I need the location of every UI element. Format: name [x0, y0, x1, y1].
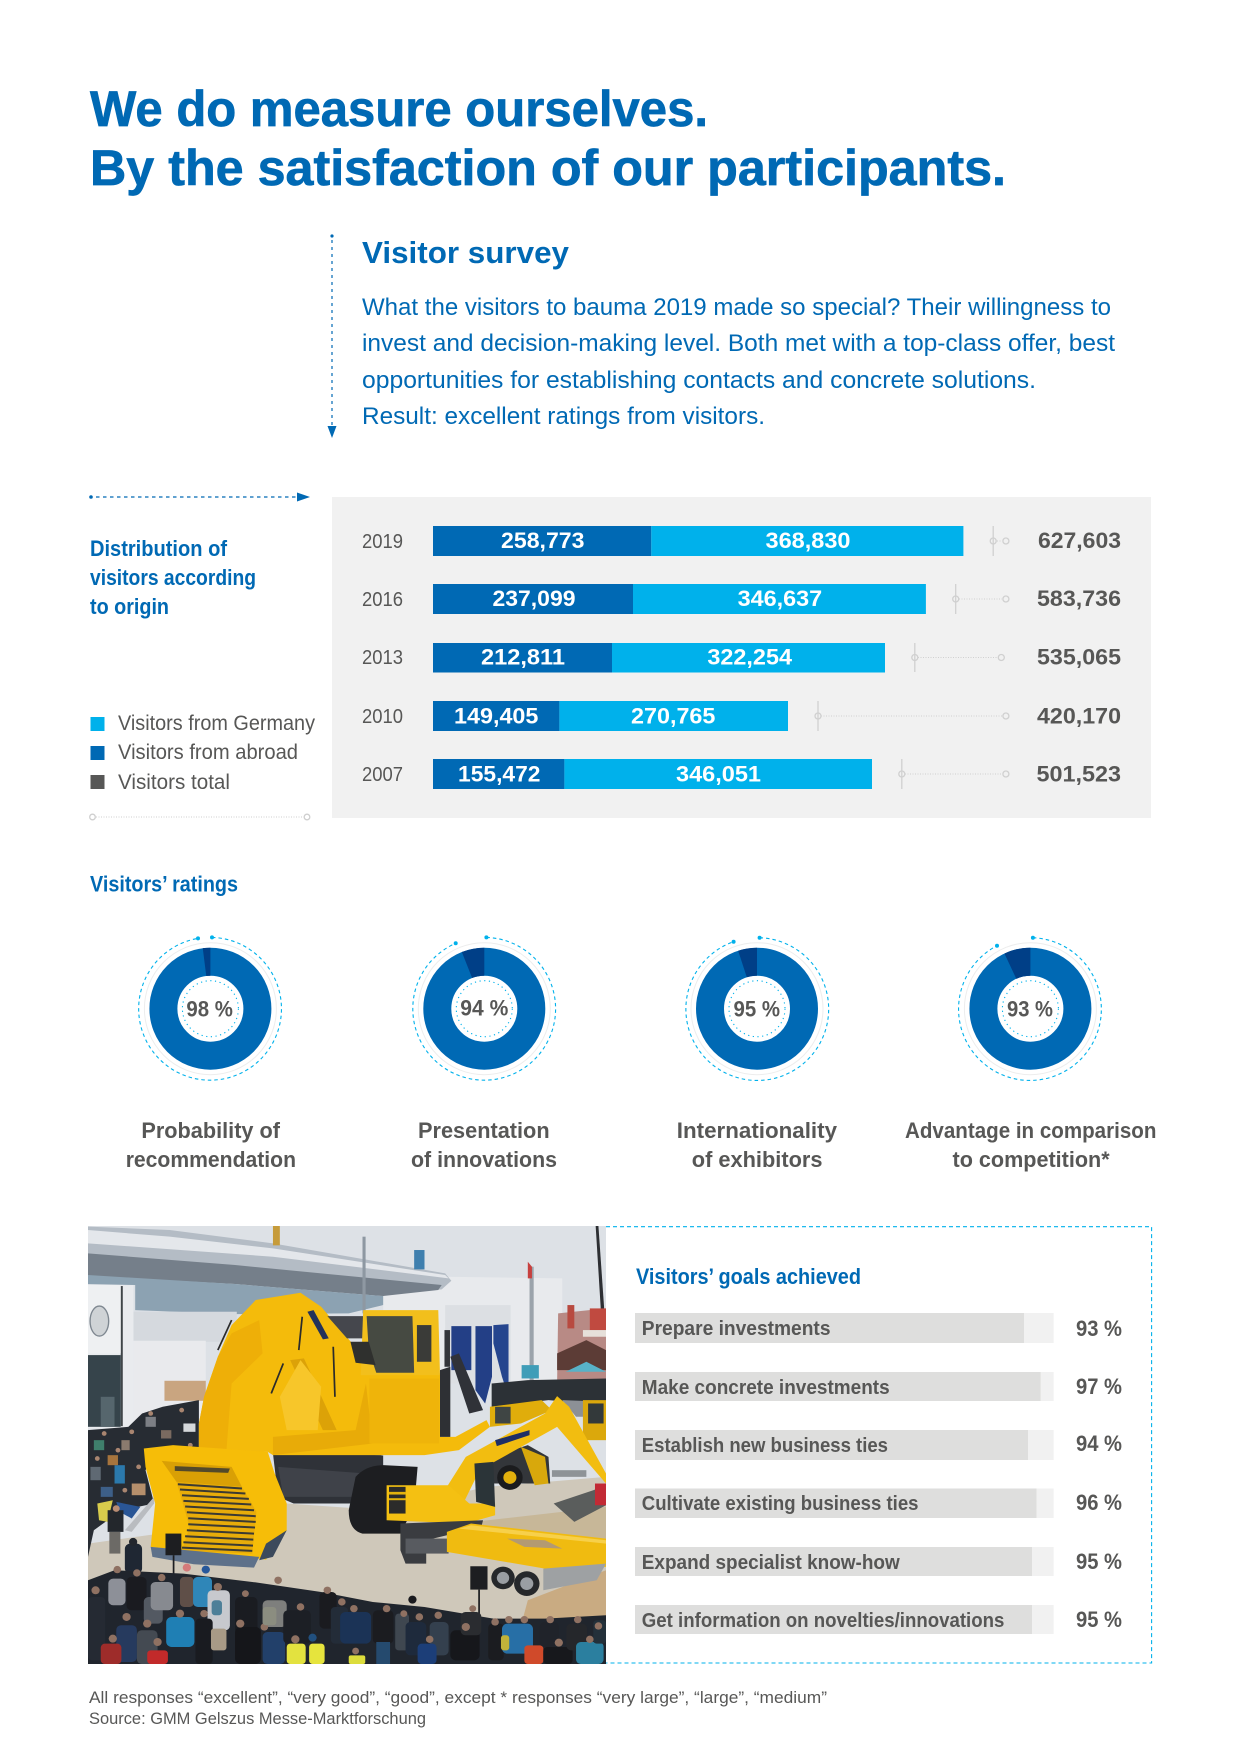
heading: visitor survey: Visitor survey: [362, 235, 570, 270]
goal bar: make concrete investments: Make concrete investments: [642, 1377, 890, 1399]
bar row 2007: 155,472: [458, 762, 540, 786]
goal bar: establish new business ties: Establish new business ties: [642, 1435, 888, 1457]
label: advantage in comparison to competition: Advantage in comparison: [905, 1118, 1156, 1143]
label: probability of recommendation: Probability of: [141, 1118, 281, 1143]
goal bar: establish new business ties: 94 %: [1076, 1431, 1122, 1456]
goal bar: expand specialist know-how: 95 %: [1076, 1549, 1122, 1574]
goal bar: prepare investments: Prepare investments: [642, 1318, 830, 1340]
donut chart: 94% presentation of innovations: 94 %: [460, 996, 508, 1021]
label: presentation of innovations: of innovations: [411, 1147, 557, 1172]
bar row 2019: 258,773: [501, 528, 584, 553]
donut chart: 94% presentation of innovations: [413, 935, 556, 1080]
goal bar: prepare investments: 93 %: [1076, 1316, 1122, 1341]
photo: excavator at trade fair: [88, 1226, 606, 1664]
spectators foreground: [88, 1570, 606, 1664]
donut chart: 93% advantage in comparison: [959, 936, 1101, 1080]
intro paragraph: What the visitors to bauma 2019 made so special? Their willingness to: [362, 294, 1111, 321]
bar row 2019: 2019: [362, 531, 403, 553]
footnote: All responses “excellent”, “very good”, “good”, except * responses “very large”, “large”, “medium”: [89, 1688, 827, 1707]
label: advantage in comparison to competition: to competition*: [952, 1147, 1110, 1172]
legend bottom connector: [90, 814, 310, 820]
wheel loader background: [490, 1400, 552, 1427]
legend item: total: Visitors total: [118, 771, 230, 794]
small excavator: [447, 1396, 606, 1505]
bar row 2016: 2016: [362, 589, 403, 611]
goal bar: prepare investments: [635, 1313, 1122, 1343]
arrow: horizontal dotted: [89, 492, 310, 502]
bar row 2019: 368,830: [766, 528, 850, 553]
bar row 2016: 583,736: [1037, 586, 1121, 611]
title: By the satisfaction of our participants.: [90, 140, 1006, 196]
bar row 2010: 2010: [362, 706, 403, 728]
bar row 2013: 212,811: [481, 644, 565, 670]
left crowd: [88, 1400, 199, 1557]
intro paragraph: Result: excellent ratings from visitors.: [362, 403, 765, 430]
speaker left: [165, 1534, 181, 1555]
hats and accents: [183, 1564, 509, 1650]
trailer: [447, 1524, 606, 1569]
bar row 2013: 535,065: [1037, 644, 1121, 670]
bar row 2007: 2007: [362, 764, 403, 786]
heading: distribution of visitors: to origin: [90, 594, 169, 619]
excavator body mass: [199, 1293, 490, 1455]
goal bar: establish new business ties: [635, 1430, 1122, 1460]
railing behind cab: [327, 1316, 364, 1338]
panel: visitors' goals achieved: [606, 1227, 1152, 1663]
bar row 2019: 627,603: [1038, 528, 1121, 553]
shovel bucket: [144, 1445, 287, 1560]
bar row 2010: 149,405: [454, 704, 538, 728]
bar row 2019: [362, 526, 1121, 556]
label: probability of recommendation: [126, 1118, 296, 1172]
boom shading: [199, 1320, 263, 1452]
heading: goals achieved: Visitors’ goals achieved: [636, 1264, 861, 1289]
undercarriage: [273, 1454, 383, 1504]
bar row 2016: 346,637: [738, 586, 822, 611]
title: [90, 81, 1006, 196]
label: internationality of exhibitors: Internationality: [677, 1118, 838, 1143]
bar row 2007: [362, 759, 1121, 789]
goal bar: make concrete investments: 97 %: [1076, 1374, 1122, 1399]
goal bar: cultivate existing business ties: 96 %: [1076, 1490, 1122, 1515]
bar row 2007: 501,523: [1036, 762, 1121, 786]
ground: [88, 1477, 606, 1664]
bar row 2013: [362, 643, 1121, 672]
label: probability of recommendation: recommendation: [126, 1147, 296, 1172]
roof: [88, 1227, 451, 1295]
banners: [451, 1326, 471, 1370]
title: We do measure ourselves.: [90, 81, 708, 137]
panel: visitor distribution chart: [332, 497, 1151, 818]
goal bar: get information on novelties: [635, 1605, 1122, 1634]
heading: visitors' ratings: Visitors’ ratings: [90, 872, 238, 896]
donut chart: 93% advantage in comparison: 93 %: [1007, 997, 1053, 1022]
left wall and volvo sign: [88, 1285, 133, 1428]
back crowd: [492, 1378, 606, 1407]
label: internationality of exhibitors: [677, 1118, 838, 1172]
ladders: [440, 1367, 450, 1437]
label: presentation of innovations: Presentation: [418, 1118, 550, 1143]
legend item: abroad: Visitors from abroad: [118, 741, 298, 764]
cab: [361, 1310, 440, 1375]
sky: [88, 1226, 606, 1664]
bar row 2010: 270,765: [631, 704, 715, 728]
bar row 2007: 346,051: [676, 762, 761, 786]
footnote: [89, 1688, 827, 1728]
goal bar: expand specialist know-how: [635, 1547, 1122, 1576]
donut chart: 98% probability of recommendation: 98 %: [186, 997, 233, 1022]
text block: visitor survey: [362, 235, 1115, 430]
intro paragraph: [362, 294, 1115, 430]
speaker right: [470, 1566, 488, 1590]
goal bar: expand specialist know-how: Expand specialist know-how: [642, 1552, 900, 1574]
footnote: Source: GMM Gelszus Messe-Marktforschung: [89, 1709, 426, 1728]
legend item: Germany: Visitors from Germany: [118, 712, 315, 735]
label: presentation of innovations: [411, 1118, 557, 1172]
glass facade: [88, 1275, 383, 1314]
arrow: vertical dotted: [328, 234, 336, 438]
legend: [90, 712, 315, 794]
back wall: [383, 1277, 562, 1383]
crawler track: [349, 1465, 418, 1534]
right fair stands: [557, 1308, 606, 1383]
intro paragraph: invest and decision-making level. Both met with a top-class offer, best: [362, 330, 1115, 357]
bar row 2013: 322,254: [707, 644, 793, 670]
goal bar: cultivate existing business ties: [635, 1488, 1122, 1518]
intro paragraph: opportunities for establishing contacts and concrete solutions.: [362, 367, 1036, 394]
poles and flag: [530, 1267, 534, 1387]
donut chart: 95% internationality of exhibitors: [686, 936, 829, 1080]
heading: distribution of visitors: Distribution of: [90, 536, 228, 561]
donut chart: 98% probability of recommendation: [139, 935, 281, 1080]
goal bar: get information on novelties: 95 %: [1076, 1607, 1122, 1632]
heading: distribution of visitors: visitors according: [90, 565, 256, 590]
donut chart: 95% internationality of exhibitors: 95 %: [734, 997, 780, 1022]
spectator heads: [91, 1566, 602, 1654]
label: advantage in comparison to competition: [905, 1118, 1156, 1172]
bar row 2010: [362, 701, 1121, 731]
goal bar: make concrete investments: [635, 1372, 1122, 1401]
goal bar: cultivate existing business ties: Cultivate existing business ties: [642, 1493, 918, 1515]
bar row 2013: 2013: [362, 647, 403, 669]
bar row 2016: [362, 584, 1121, 614]
bucket grille: [178, 1484, 256, 1551]
label: internationality of exhibitors: of exhibitors: [692, 1147, 822, 1172]
bar row 2010: 420,170: [1037, 704, 1121, 728]
goal bar: get information on novelties: Get information on novelties/innovations: [642, 1610, 1004, 1632]
heading: distribution of visitors: [90, 536, 256, 619]
bar row 2016: 237,099: [492, 586, 576, 611]
